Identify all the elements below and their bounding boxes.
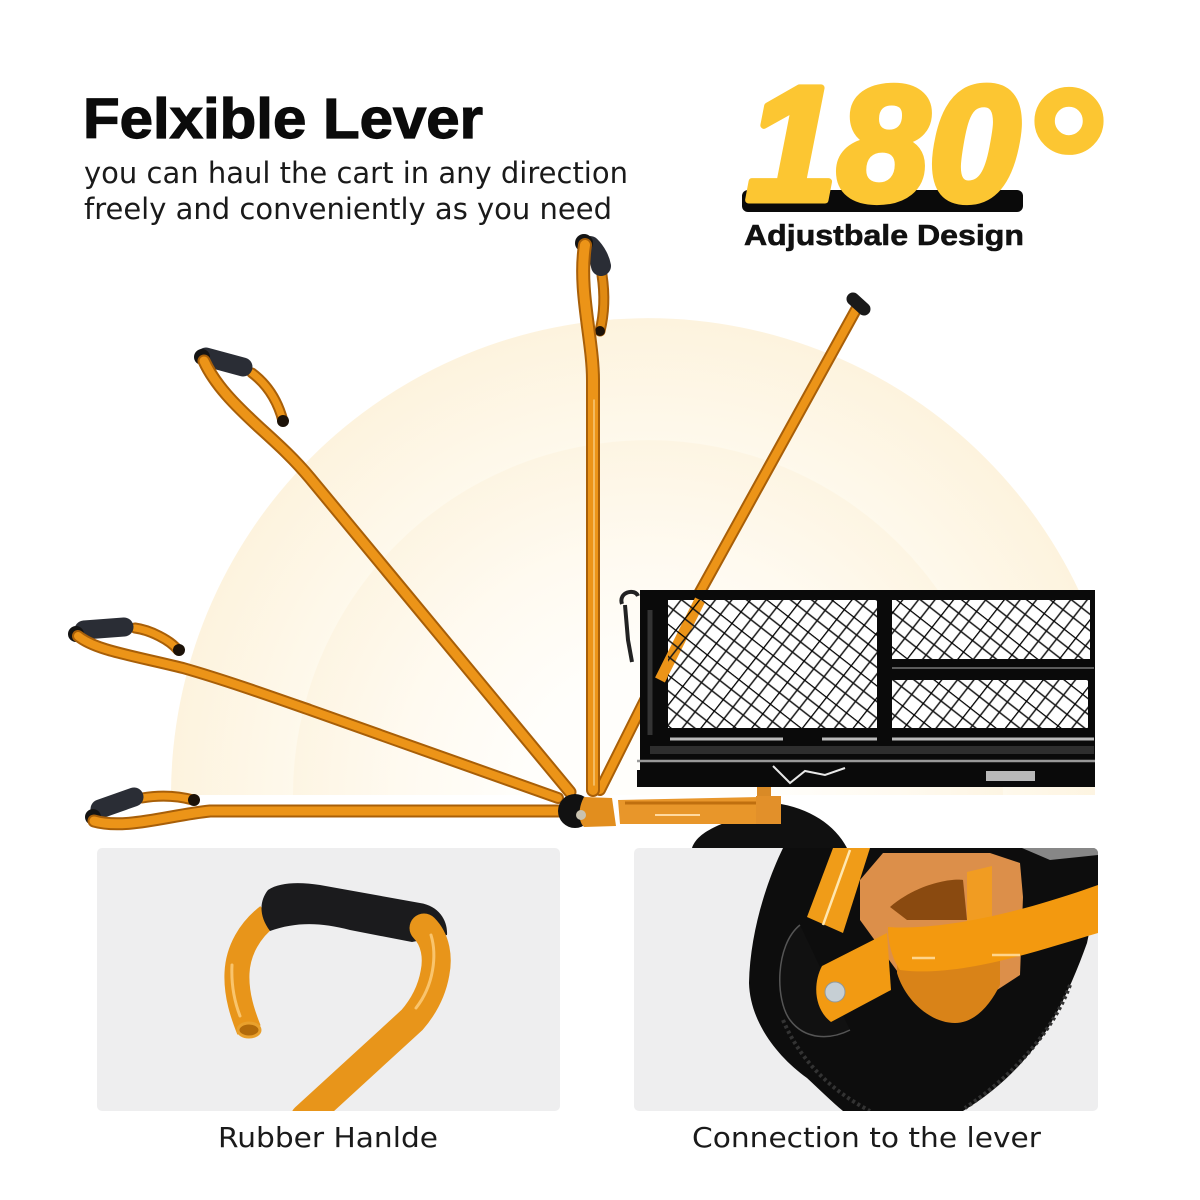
description text: you can haul the cart in any direction [84,156,628,190]
wheel top behind arm [692,803,847,848]
captions [218,1121,1042,1154]
panel: lever connection detail [634,848,1098,1111]
180 degree badge: ° [1018,47,1102,276]
captions: Rubber Hanlde [218,1121,438,1154]
180 degree badge: 180 [746,52,1020,235]
radial glow semicircles [171,318,1125,795]
bolt [825,982,845,1002]
lever position: vertical [575,234,605,790]
cart basket [621,590,1095,787]
pivot joint and arm [558,786,781,828]
tire [749,848,1098,1111]
open tube end [232,916,268,1037]
lever position: diagonal [194,349,570,792]
main lever tube [305,928,436,1118]
orange fork [860,853,1023,990]
lever position: upright forward [600,299,864,790]
mesh panels [660,600,1090,728]
captions: Connection to the lever [692,1121,1042,1154]
rubber grip [262,883,447,942]
description text [84,156,628,226]
180 degree badge [742,47,1102,276]
title: Felxible Lever [83,87,483,151]
description text: freely and conveniently as you need [84,192,612,226]
180 degree badge: Adjustbale Design [744,220,1024,252]
lever position: horizontal [85,794,558,825]
panel: rubber handle detail [97,848,560,1118]
lever position: low angle [68,626,558,798]
